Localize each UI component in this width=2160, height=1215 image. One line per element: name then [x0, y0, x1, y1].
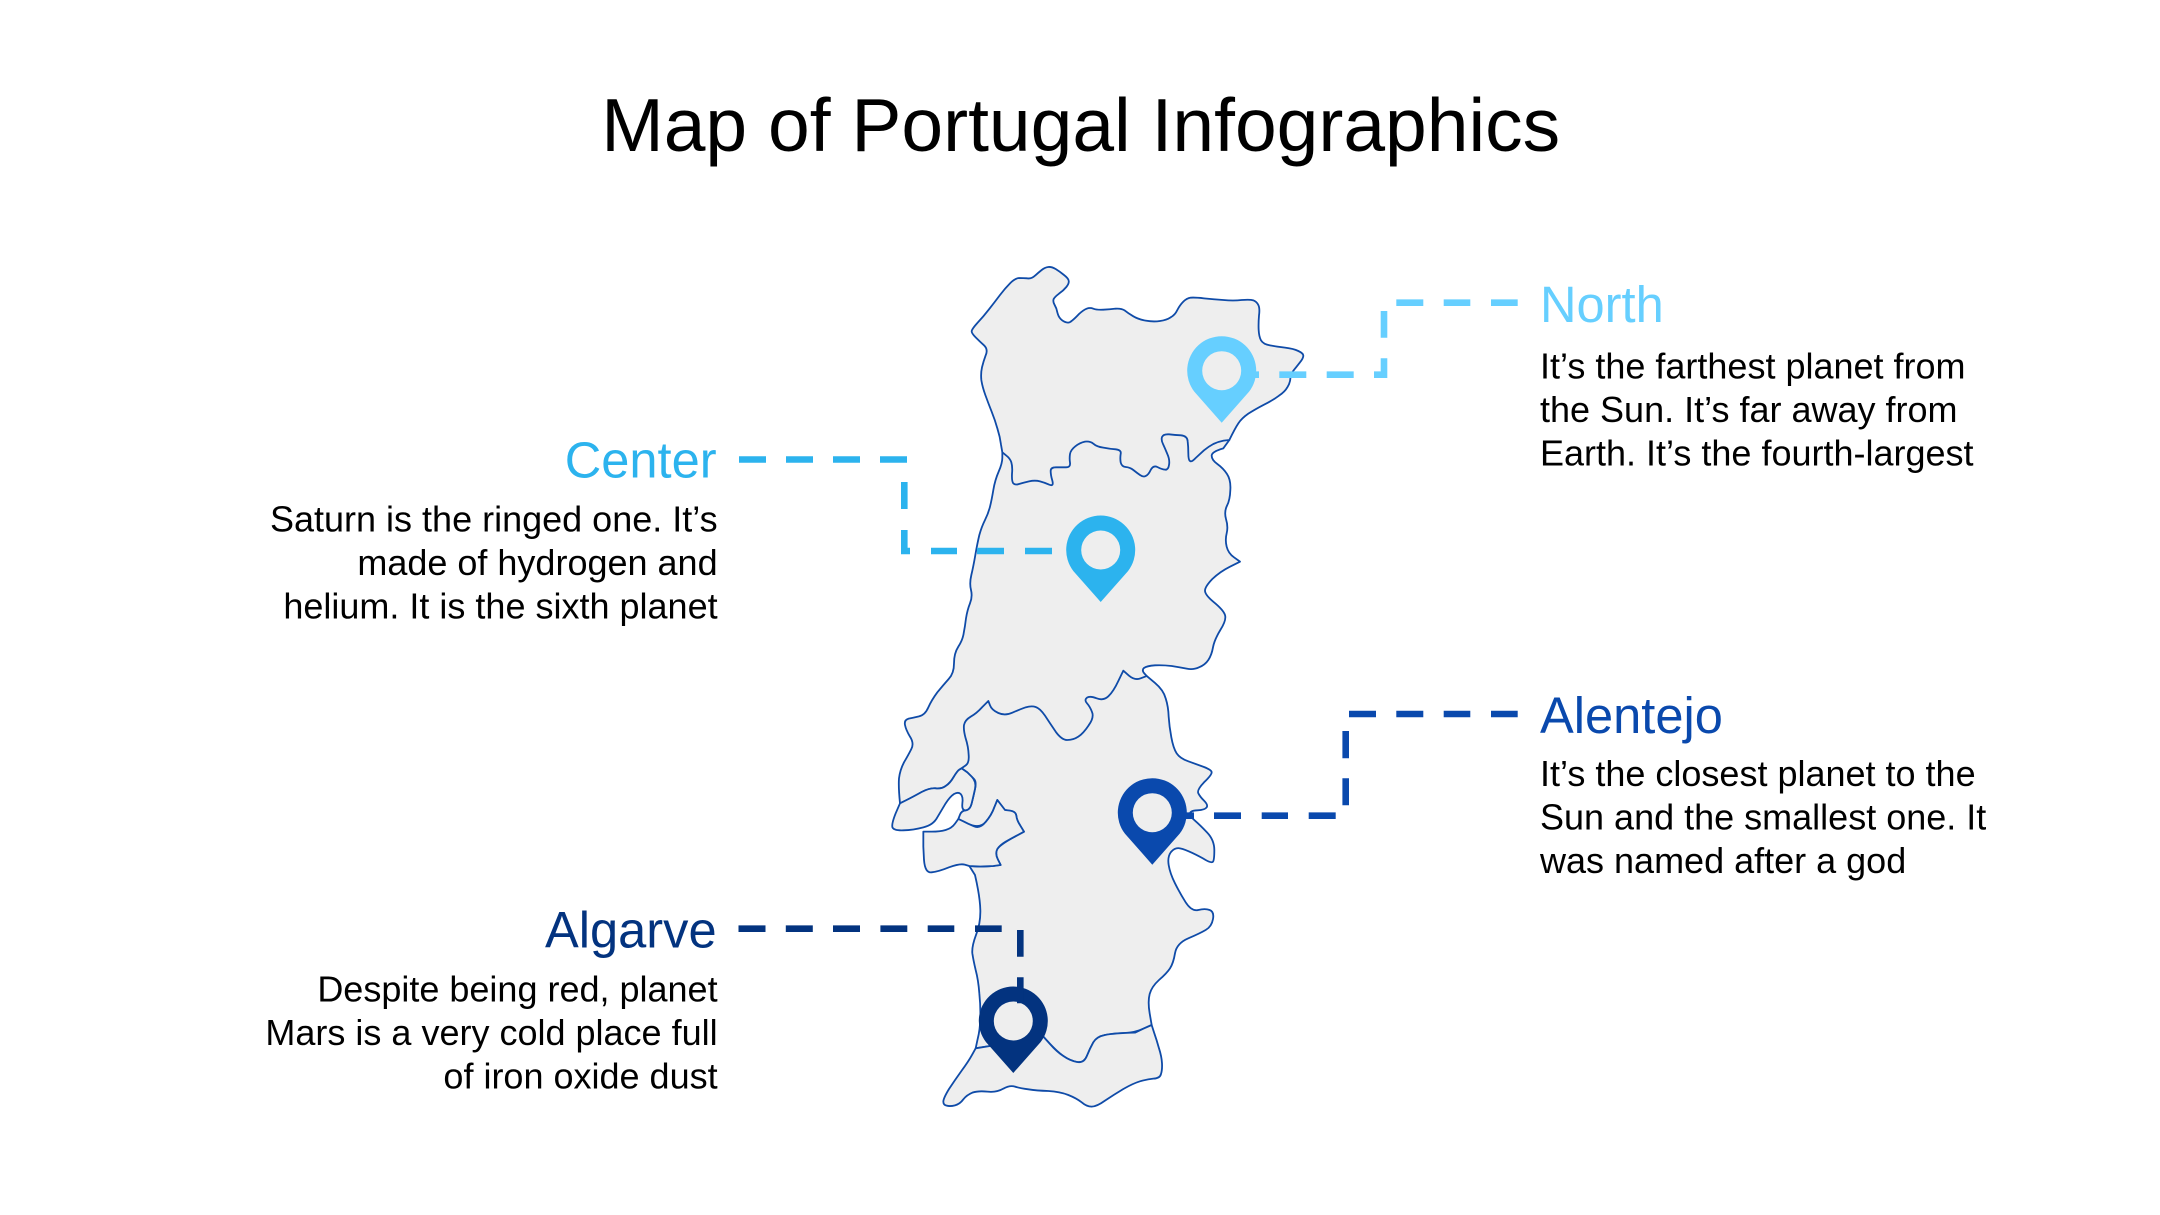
text block: Alentejo: It’s the closest planet to the	[1540, 753, 1976, 794]
text block: North: Earth. It’s the fourth-largest	[1540, 432, 1974, 473]
map of Portugal	[892, 267, 1303, 1107]
region: Center	[899, 350, 1240, 803]
text block: North: It’s the farthest planet from	[1540, 346, 1966, 387]
dashed connector: Center	[739, 460, 1052, 554]
text block: North: North	[1540, 276, 1664, 333]
region: Lisbon peninsula	[892, 768, 975, 830]
text block: Alentejo	[1539, 687, 1986, 881]
pin: Alentejo	[1118, 778, 1187, 865]
text block: North	[1540, 276, 1974, 473]
region: Algarve	[943, 1025, 1162, 1107]
text block: Alentejo: Alentejo	[1540, 687, 1723, 744]
dashed connector: Algarve	[738, 929, 1020, 1003]
region: North	[972, 267, 1303, 485]
text block: Algarve: Mars is a very cold place full	[265, 1012, 718, 1053]
text block: Center: made of hydrogen and	[357, 542, 718, 583]
region: Alentejo	[947, 650, 1214, 1062]
text block: Algarve	[265, 901, 718, 1096]
text block: Center	[270, 431, 718, 626]
dashed connector: North	[1245, 303, 1518, 378]
dashed connector: Alentejo	[1185, 714, 1518, 816]
title: Map of Portugal Infographics	[601, 83, 1560, 167]
text block: Algarve: of iron oxide dust	[443, 1055, 718, 1096]
pin: North	[1187, 336, 1256, 423]
text block: Center: Center	[565, 431, 717, 488]
text block: Center: helium. It is the sixth planet	[283, 585, 718, 626]
text block: Algarve: Despite being red, planet	[317, 968, 718, 1010]
pin: Center	[1066, 516, 1135, 602]
text block: Alentejo: was named after a god	[1539, 840, 1906, 881]
text block: Center: Saturn is the ringed one. It’s	[270, 498, 718, 540]
text block: North: the Sun. It’s far away from	[1540, 389, 1958, 430]
region: Setubal peninsula	[923, 800, 1024, 872]
text block: Algarve: Algarve	[545, 901, 717, 958]
pin: Algarve	[979, 987, 1048, 1073]
text block: Alentejo: Sun and the smallest one. It	[1540, 796, 1986, 837]
